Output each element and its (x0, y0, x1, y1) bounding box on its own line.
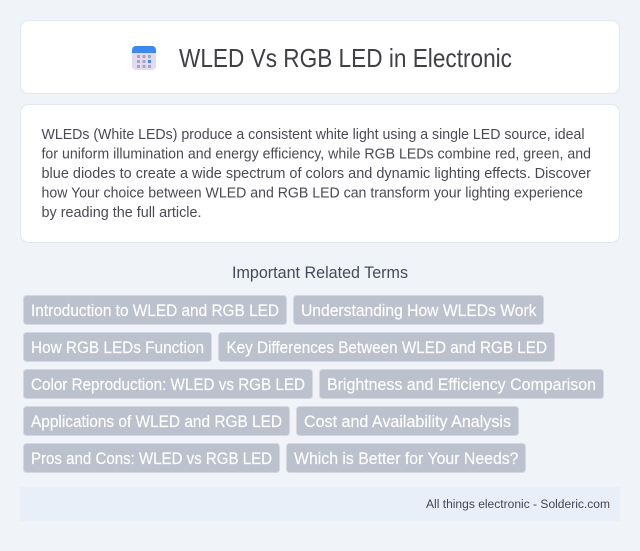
tag (320, 370, 604, 398)
footer bar (20, 487, 620, 521)
description text: for uniform illumination and energy efficiency, while RGB LEDs combine red, green, and (42, 146, 591, 162)
tag (286, 444, 526, 472)
icon: calendar grid (132, 46, 156, 70)
description text: WLEDs (White LEDs) produce a consistent white light using a single LED source, ideal (42, 127, 584, 143)
footer text: All things electronic - Solderic.com (426, 497, 610, 511)
tag (24, 370, 312, 398)
header panel (20, 20, 620, 94)
tag: How RGB LEDs Function (31, 339, 204, 357)
tag: Understanding How WLEDs Work (301, 302, 537, 320)
tag (294, 296, 544, 324)
tag: Introduction to WLED and RGB LED (31, 302, 279, 320)
tag list (24, 296, 604, 472)
tag (24, 296, 286, 324)
panel: description (20, 104, 620, 242)
tag (24, 444, 280, 472)
tag: Brightness and Efficiency Comparison (327, 376, 596, 394)
tag: Which is Better for Your Needs? (294, 450, 518, 468)
tag: Key Differences Between WLED and RGB LED (226, 339, 547, 357)
tag: Applications of WLED and RGB LED (31, 413, 282, 431)
tag (296, 406, 518, 436)
tag: Pros and Cons: WLED vs RGB LED (31, 450, 272, 468)
description text: how Your choice between WLED and RGB LED can transform your lighting experience (42, 186, 583, 202)
tag (218, 332, 554, 362)
description text (42, 127, 591, 221)
tag (24, 332, 212, 362)
tag: Color Reproduction: WLED vs RGB LED (31, 376, 305, 394)
heading: important related terms: Important Related Terms (232, 264, 408, 282)
description text: by reading the full article. (42, 205, 202, 221)
title: WLED Vs RGB LED in Electronic (179, 45, 512, 73)
tag (24, 406, 290, 436)
description text: blue diodes to create a wide spectrum of colors and dynamic lighting effects. Discover (42, 166, 591, 182)
tag: Cost and Availability Analysis (304, 413, 511, 431)
